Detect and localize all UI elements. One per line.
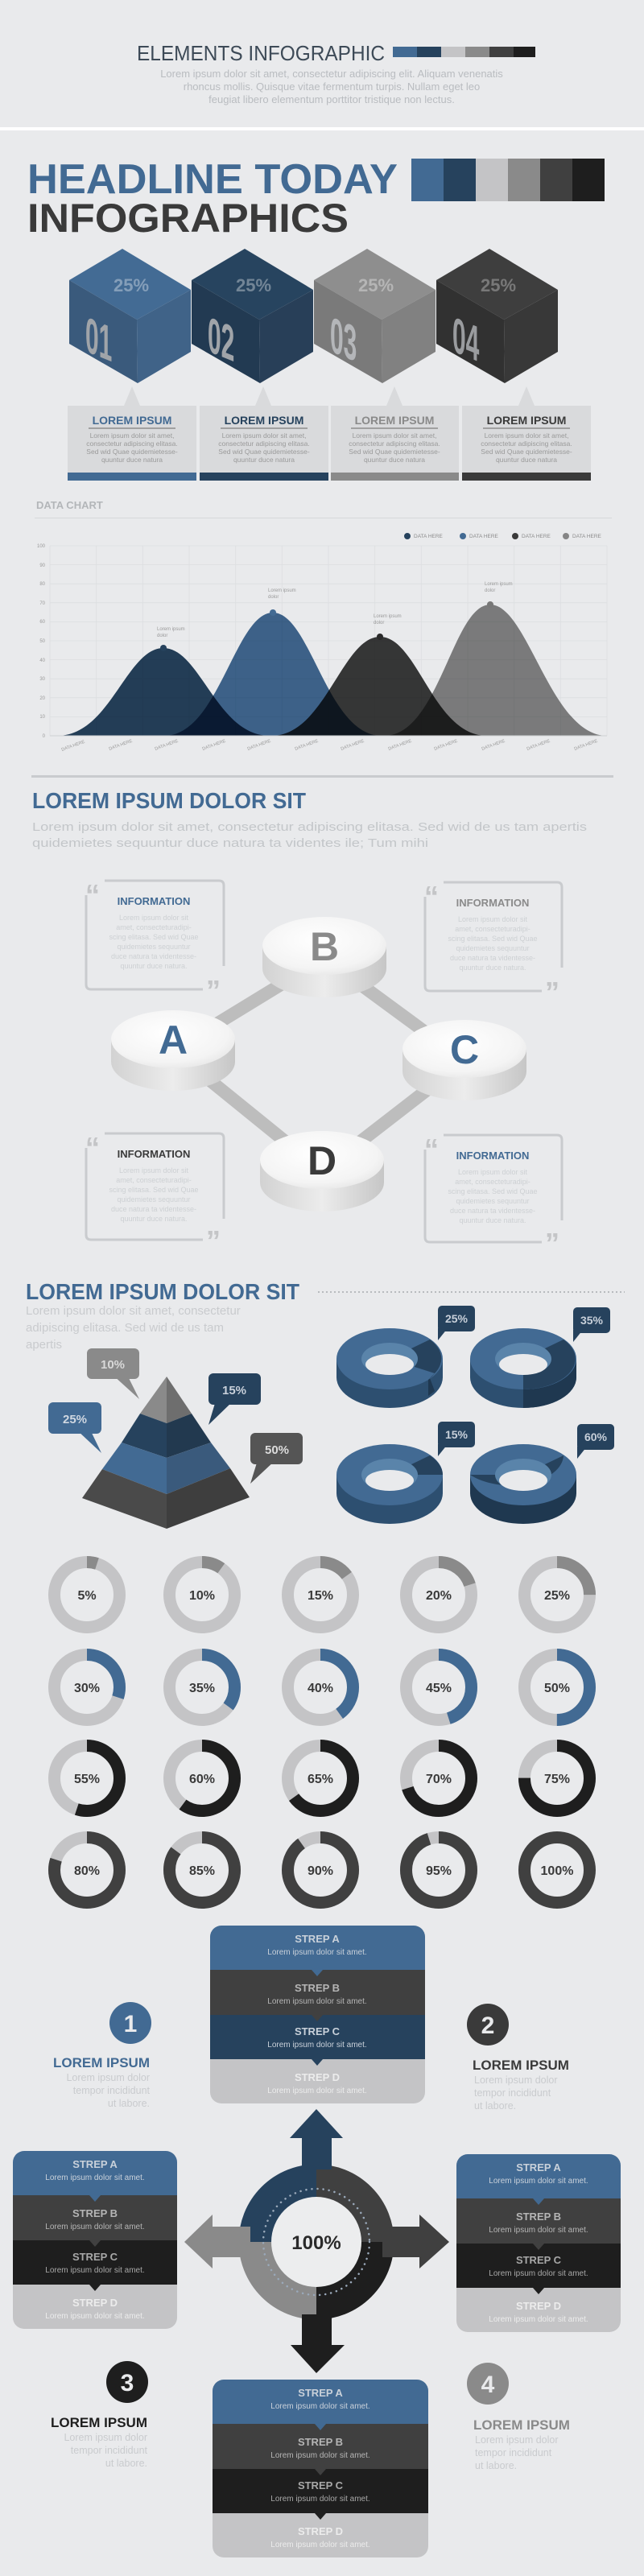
disc B: B	[310, 924, 339, 969]
3D donut 35%	[470, 1328, 576, 1408]
ring labels: 25%	[544, 1589, 570, 1603]
info box 2: Lorem ipsum dolor sit amet,	[222, 431, 306, 440]
area chart: 20	[39, 696, 46, 701]
section heading 2: LOREM IPSUM DOLOR SIT	[32, 788, 306, 813]
quote box top-left: “	[85, 878, 100, 911]
info box 4: Lorem ipsum dolor sit amet,	[485, 431, 568, 440]
area chart: 30	[39, 677, 46, 682]
info box 3: Lorem ipsum dolor sit amet,	[353, 431, 436, 440]
step label 1: LOREM IPSUM	[53, 2055, 150, 2070]
area chart: DATA HERE	[388, 739, 413, 752]
quote box top-right: scing elitasa. Sed wid Quae	[448, 935, 538, 943]
area chart: 90	[39, 564, 46, 568]
cube 03: 03	[330, 307, 357, 373]
quote box top-left: quuntur duce natura.	[120, 962, 188, 970]
area chart: dolor	[157, 634, 167, 638]
headline	[27, 156, 398, 241]
quote box top-right: quidemietes sequuntur	[456, 944, 530, 952]
section heading 3	[26, 1279, 625, 1352]
quote box top-left: Lorem ipsum dolor sit	[119, 914, 189, 922]
disc C	[402, 1020, 526, 1100]
quote box bottom-left: INFORMATION	[118, 1148, 190, 1160]
disc C: C	[450, 1027, 479, 1072]
step label 3: tempor incididunt	[71, 2445, 148, 2456]
area chart: Lorem ipsum	[374, 614, 402, 619]
area chart: 80	[39, 582, 46, 587]
step label 1: ut labore.	[108, 2098, 150, 2109]
quote box top-right: INFORMATION	[456, 897, 529, 909]
quote box bottom-right: quuntur duce natura.	[459, 1216, 526, 1224]
header intro text: feugiat libero elementum porttitor tristique non lectus.	[208, 93, 455, 105]
step label 4: LOREM IPSUM	[473, 2417, 570, 2433]
cube 02: 02	[208, 307, 234, 373]
cube 02	[192, 249, 313, 383]
quote box bottom-right: scing elitasa. Sed wid Quae	[448, 1187, 538, 1195]
step label 2: LOREM IPSUM	[473, 2058, 569, 2073]
area chart: 100	[37, 544, 46, 549]
steps box bottom: Lorem ipsum dolor sit amet.	[270, 2451, 370, 2460]
pyramid	[82, 1377, 250, 1529]
ring labels: 35%	[189, 1682, 215, 1695]
quote box top-right	[424, 880, 562, 1009]
area chart: Lorem ipsum	[485, 582, 513, 587]
steps box top: STREP D	[295, 2071, 340, 2083]
info box 1: consectetur adipiscing elitasa.	[86, 440, 178, 448]
steps box top: STREP B	[295, 1982, 340, 1994]
steps box right: Lorem ipsum dolor sit amet.	[489, 2226, 588, 2235]
quote box bottom-left: ”	[206, 1224, 221, 1257]
ring labels: 30%	[74, 1682, 100, 1695]
cube 04: 04	[452, 307, 480, 373]
steps box top: STREP A	[295, 1933, 340, 1945]
chart legend: DATA HERE	[522, 534, 551, 539]
area chart: DATA HERE	[61, 740, 86, 753]
quote box bottom-left: scing elitasa. Sed wid Quae	[109, 1186, 199, 1194]
ring labels: 80%	[74, 1864, 100, 1878]
steps box left: STREP D	[72, 2297, 118, 2309]
quote box bottom-left: amet, consecteturadipi-	[116, 1176, 192, 1184]
header title: ELEMENTS INFOGRAPHIC	[137, 41, 385, 65]
step label 1: Lorem ipsum dolor	[66, 2072, 150, 2083]
donut callouts: 15%	[445, 1428, 469, 1441]
chart legend: DATA HERE	[572, 534, 602, 539]
step label 3: Lorem ipsum dolor	[64, 2432, 147, 2443]
info box 1: LOREM IPSUM	[93, 414, 171, 427]
steps box right: STREP D	[516, 2300, 561, 2312]
quote box top-right: Lorem ipsum dolor sit	[458, 915, 528, 923]
steps box left: STREP A	[72, 2158, 118, 2170]
info box 4: LOREM IPSUM	[487, 414, 566, 427]
steps box right	[456, 2154, 621, 2332]
step label 3: LOREM IPSUM	[51, 2415, 147, 2430]
ring labels: 5%	[77, 1589, 97, 1603]
area chart: dolor	[485, 588, 495, 593]
quote box top-right: quuntur duce natura.	[459, 964, 526, 972]
section heading 2: Lorem ipsum dolor sit amet, consectetur adipiscing elitasa. Sed wid de us tam apertis	[32, 820, 587, 834]
quote box bottom-right: amet, consecteturadipi-	[455, 1178, 530, 1186]
steps box bottom: Lorem ipsum dolor sit amet.	[270, 2541, 370, 2549]
info box 4: quuntur duce natura	[496, 456, 557, 464]
step label 2: Lorem ipsum dolor	[474, 2074, 558, 2086]
step label 3: 3	[121, 2370, 134, 2396]
info box 2: consectetur adipiscing elitasa.	[218, 440, 310, 448]
quote box bottom-left: quuntur duce natura.	[120, 1215, 188, 1223]
cube 01	[69, 249, 191, 383]
3D donut 60%	[470, 1444, 576, 1524]
ring labels: 45%	[426, 1682, 452, 1695]
disc A: A	[159, 1018, 188, 1063]
step label 3: ut labore.	[105, 2458, 147, 2469]
percentage ring grid	[55, 1562, 589, 1903]
cube 01: 01	[85, 307, 112, 373]
ring labels: 75%	[544, 1773, 570, 1786]
steps box left: Lorem ipsum dolor sit amet.	[45, 2223, 145, 2231]
step label 2: ut labore.	[474, 2100, 516, 2112]
steps box bottom: Lorem ipsum dolor sit amet.	[270, 2495, 370, 2504]
info box 2: LOREM IPSUM	[225, 414, 303, 427]
callout 10%: 10%	[101, 1358, 125, 1372]
cube 02: 25%	[236, 275, 271, 295]
quote box bottom-left: duce natura ta videntesse-	[111, 1205, 196, 1213]
steps box bottom: STREP A	[298, 2387, 343, 2399]
step label 1: tempor incididunt	[73, 2085, 151, 2096]
quote box top-right: amet, consecteturadipi-	[455, 925, 530, 933]
header intro text	[160, 68, 503, 105]
area chart: DATA HERE	[574, 739, 599, 752]
disc D	[260, 1131, 384, 1212]
steps box right: STREP A	[516, 2161, 561, 2174]
donut callouts: 25%	[445, 1312, 469, 1325]
callout 25%	[48, 1402, 101, 1453]
ring labels: 85%	[189, 1864, 215, 1878]
area chart: DATA HERE	[526, 739, 551, 752]
steps box bottom: Lorem ipsum dolor sit amet.	[270, 2402, 370, 2411]
disc B	[262, 917, 386, 997]
steps box bottom: STREP B	[298, 2436, 343, 2448]
steps box left: Lorem ipsum dolor sit amet.	[45, 2312, 145, 2321]
info box 3	[331, 386, 459, 481]
quote box bottom-right	[424, 1133, 562, 1260]
info box 3: quuntur duce natura	[364, 456, 425, 464]
callout 25%: 25%	[63, 1413, 87, 1426]
quote box top-left: amet, consecteturadipi-	[116, 923, 192, 931]
area chart	[37, 544, 607, 753]
info box 2: quuntur duce natura	[233, 456, 295, 464]
quote box top-left: quidemietes sequuntur	[117, 943, 191, 951]
step label 1: 1	[124, 2011, 137, 2037]
disc D: D	[308, 1138, 336, 1183]
quote box bottom-right: duce natura ta videntesse-	[450, 1207, 535, 1215]
center ring with arrows: 100%	[291, 2232, 341, 2254]
info box 1: Sed wid Quae quidemietesse-	[86, 448, 178, 456]
headline color bar	[411, 159, 605, 201]
quote box top-left	[85, 878, 224, 1007]
quote box top-right: “	[424, 880, 439, 913]
area chart: DATA HERE	[202, 739, 227, 752]
donut callouts: 60%	[584, 1430, 608, 1443]
cube 04	[436, 249, 558, 383]
header color bar	[393, 47, 535, 57]
steps box top: Lorem ipsum dolor sit amet.	[267, 2087, 367, 2095]
steps box left: STREP B	[72, 2207, 118, 2219]
diamond connectors	[173, 958, 464, 1171]
cube 03: 25%	[358, 275, 394, 295]
header intro text: rhoncus mollis. Quisque vitae fermentum turpis. Nullam eget leo	[184, 80, 480, 93]
steps box left: Lorem ipsum dolor sit amet.	[45, 2174, 145, 2182]
info box 4	[462, 386, 591, 481]
area chart: DATA HERE	[155, 739, 180, 752]
area chart: 50	[39, 639, 46, 644]
steps box top: STREP C	[295, 2025, 341, 2037]
center ring with arrows	[184, 2109, 449, 2373]
data chart heading: DATA CHART	[36, 499, 103, 511]
quote box top-left: scing elitasa. Sed wid Quae	[109, 933, 199, 941]
step label 2	[467, 2004, 569, 2112]
section heading 2	[32, 788, 587, 850]
info box 3: Sed wid Quae quidemietesse-	[349, 448, 440, 456]
headline: INFOGRAPHICS	[27, 196, 349, 241]
info box 1	[68, 386, 196, 481]
step label 1	[53, 2002, 151, 2109]
header intro text: Lorem ipsum dolor sit amet, consectetur adipiscing elit. Aliquam venenatis	[160, 68, 503, 80]
quote box bottom-right: ”	[545, 1227, 559, 1260]
steps box left: STREP C	[72, 2251, 118, 2263]
steps box bottom	[213, 2380, 428, 2557]
area chart: 0	[43, 734, 46, 739]
callout 15%	[208, 1373, 261, 1425]
info box 4: Sed wid Quae quidemietesse-	[481, 448, 572, 456]
area chart: DATA HERE	[434, 739, 459, 752]
ring labels: 55%	[74, 1773, 100, 1786]
section heading 3: LOREM IPSUM DOLOR SIT	[26, 1279, 299, 1304]
area chart: Lorem ipsum	[268, 588, 296, 593]
cube 01: 25%	[114, 275, 149, 295]
steps box bottom: STREP C	[298, 2479, 344, 2491]
disc A	[111, 1010, 235, 1091]
steps box left: Lorem ipsum dolor sit amet.	[45, 2266, 145, 2275]
quote box top-left: duce natura ta videntesse-	[111, 952, 196, 960]
info box 3: consectetur adipiscing elitasa.	[349, 440, 440, 448]
step label 4: ut labore.	[475, 2460, 517, 2471]
steps box right: Lorem ipsum dolor sit amet.	[489, 2177, 588, 2186]
donut callouts	[438, 1306, 614, 1459]
quote box top-left: INFORMATION	[118, 895, 190, 907]
quote box top-right: ”	[545, 976, 559, 1009]
chart legend	[404, 533, 602, 539]
area chart: DATA HERE	[247, 739, 272, 752]
3D donut 25%	[336, 1328, 443, 1408]
step label 4: Lorem ipsum dolor	[475, 2434, 559, 2446]
ring labels: 90%	[308, 1864, 333, 1878]
steps box top: Lorem ipsum dolor sit amet.	[267, 1997, 367, 2006]
ring labels: 95%	[426, 1864, 452, 1878]
cube 04: 25%	[481, 275, 516, 295]
steps box left	[13, 2151, 177, 2329]
callout 15%: 15%	[222, 1384, 246, 1397]
callout 10%	[87, 1348, 139, 1399]
area chart: dolor	[268, 595, 279, 600]
ring labels: 65%	[308, 1773, 333, 1786]
quote box bottom-left: “	[85, 1131, 100, 1164]
section heading 3: apertis	[26, 1338, 62, 1352]
quote box bottom-left	[85, 1131, 224, 1257]
step label 4: tempor incididunt	[475, 2447, 552, 2458]
ring labels: 70%	[426, 1773, 452, 1786]
steps box right: Lorem ipsum dolor sit amet.	[489, 2315, 588, 2324]
chart legend: DATA HERE	[414, 534, 444, 539]
step label 2: tempor incididunt	[474, 2087, 551, 2099]
area chart: 60	[39, 620, 46, 625]
quote box top-left: ”	[206, 974, 221, 1007]
steps box top	[210, 1926, 425, 2103]
info box 2: Sed wid Quae quidemietesse-	[218, 448, 310, 456]
step label 4	[467, 2363, 570, 2471]
quote box bottom-left: Lorem ipsum dolor sit	[119, 1166, 189, 1174]
area chart: Lorem ipsum	[157, 627, 185, 632]
step label 2: 2	[481, 2013, 494, 2039]
steps box bottom: STREP D	[298, 2525, 343, 2537]
headline: HEADLINE TODAY	[27, 156, 398, 203]
steps box right: STREP B	[516, 2211, 561, 2223]
section heading 3: adipiscing elitasa. Sed wid de us tam	[26, 1321, 224, 1335]
area chart: DATA HERE	[109, 739, 134, 752]
area chart: DATA HERE	[295, 739, 320, 752]
area chart: DATA HERE	[341, 739, 365, 752]
quote box bottom-right: quidemietes sequuntur	[456, 1197, 530, 1205]
steps box right: Lorem ipsum dolor sit amet.	[489, 2269, 588, 2278]
info box 1: quuntur duce natura	[101, 456, 163, 464]
chart legend: DATA HERE	[469, 534, 499, 539]
ring labels: 100%	[541, 1864, 573, 1878]
section heading 3: Lorem ipsum dolor sit amet, consectetur	[26, 1304, 241, 1318]
ring labels: 15%	[308, 1589, 333, 1603]
ring labels: 60%	[189, 1773, 215, 1786]
area chart: dolor	[374, 621, 384, 625]
donut callouts: 35%	[580, 1314, 604, 1327]
section heading 2: quidemietes sequuntur duce natura ta videntes ile; Tum mihi	[32, 836, 428, 850]
quote box bottom-right: Lorem ipsum dolor sit	[458, 1168, 528, 1176]
quote box bottom-right: INFORMATION	[456, 1150, 529, 1162]
info box 1: Lorem ipsum dolor sit amet,	[90, 431, 174, 440]
info box 3: LOREM IPSUM	[355, 414, 434, 427]
area chart: DATA HERE	[481, 739, 506, 752]
callout 50%: 50%	[265, 1443, 289, 1457]
quote box bottom-right: “	[424, 1133, 439, 1166]
info box 2	[200, 386, 328, 481]
area chart: 40	[39, 658, 46, 663]
steps box top: Lorem ipsum dolor sit amet.	[267, 2041, 367, 2050]
ring labels	[74, 1589, 573, 1878]
quote box top-right: duce natura ta videntesse-	[450, 954, 535, 962]
ring labels: 50%	[544, 1682, 570, 1695]
steps box top: Lorem ipsum dolor sit amet.	[267, 1948, 367, 1957]
cube 03	[314, 249, 436, 383]
quote box bottom-left: quidemietes sequuntur	[117, 1195, 191, 1203]
ring labels: 10%	[189, 1589, 215, 1603]
3D donut 15%	[336, 1444, 443, 1524]
step label 3	[51, 2361, 148, 2469]
step label 4: 4	[481, 2372, 495, 2398]
steps box right: STREP C	[516, 2254, 562, 2266]
area chart: 70	[39, 601, 46, 606]
ring labels: 20%	[426, 1589, 452, 1603]
ring labels: 40%	[308, 1682, 333, 1695]
info box 4: consectetur adipiscing elitasa.	[481, 440, 572, 448]
callout 50%	[250, 1433, 303, 1484]
area chart: 10	[39, 715, 46, 720]
